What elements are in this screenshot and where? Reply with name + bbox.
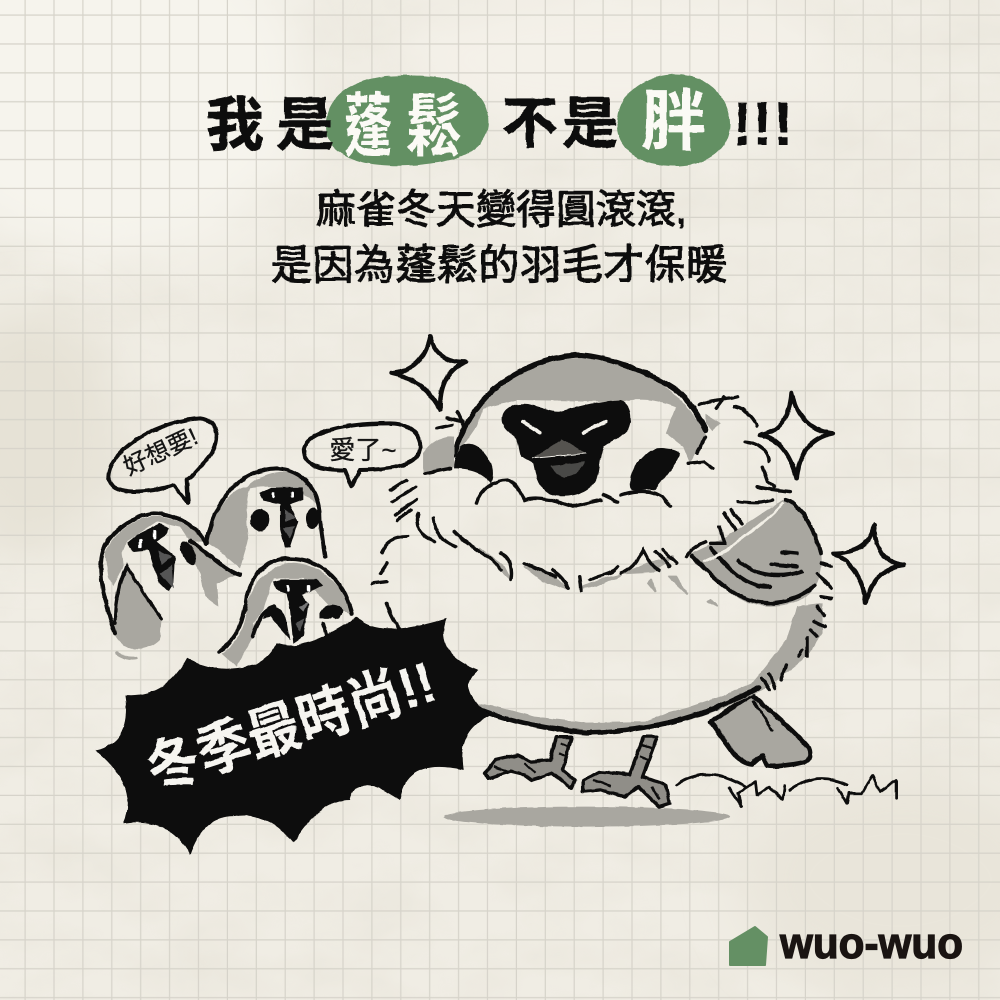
green blob behind 胖 <box>617 74 730 166</box>
small birds group <box>101 418 420 667</box>
green blob behind 蓬鬆 <box>326 75 488 166</box>
logo wordmark: wuo-wuo <box>779 919 963 968</box>
subtitle line 1: 麻雀冬天變得圓滾滾, <box>316 188 687 232</box>
right cheek <box>630 448 680 490</box>
title text white: 蓬: 蓬 <box>344 87 392 165</box>
tail line <box>754 702 773 730</box>
subtitle <box>271 188 728 288</box>
title text black: 我是: 我是 <box>206 93 334 158</box>
sparkle right upper <box>761 393 833 478</box>
ruff shadow <box>480 548 718 607</box>
face mask <box>502 400 631 496</box>
speech text: 好想要: 好想要! <box>119 423 202 481</box>
burst shape <box>95 617 492 855</box>
starburst callout <box>95 617 492 855</box>
logo <box>730 919 963 968</box>
speech text: 愛了: 愛了~ <box>329 435 397 465</box>
speech bubble: 好想要 <box>108 418 217 503</box>
ground grass strokes <box>676 775 897 807</box>
sparkle top left <box>392 337 466 410</box>
body outline <box>459 687 759 733</box>
beak highlight <box>532 453 587 458</box>
right shoulder shading <box>705 413 721 432</box>
small bird: left <box>101 513 240 659</box>
logo house icon <box>730 927 767 965</box>
mouth <box>550 462 585 477</box>
tail <box>711 695 810 766</box>
feather strokes <box>373 397 831 690</box>
sparkle right lower <box>833 525 903 603</box>
left cheek <box>454 444 493 483</box>
head gray cap <box>456 358 705 463</box>
legs and feet <box>485 737 669 807</box>
body gray shading <box>459 603 823 734</box>
title exclamation marks: !!! <box>732 90 794 159</box>
beak <box>532 438 587 458</box>
small bird: front <box>218 558 352 667</box>
eye highlights <box>523 422 606 433</box>
head outline <box>454 355 705 455</box>
small bird: back <box>207 468 325 568</box>
title <box>206 74 794 166</box>
left shoulder shading <box>423 436 454 473</box>
main sparrow <box>373 337 903 827</box>
wing lines <box>692 500 821 603</box>
burst text: 冬季最時尚!! <box>138 649 444 804</box>
speech bubble: 愛了 <box>303 423 420 487</box>
wing <box>692 500 822 606</box>
title text black: 不是: 不是 <box>502 92 618 155</box>
wing highlight <box>704 503 783 562</box>
subtitle line 2: 是因為蓬鬆的羽毛才保暖 <box>271 242 728 288</box>
title text white: 鬆: 鬆 <box>406 88 462 165</box>
title text white: 胖: 胖 <box>641 84 707 158</box>
ground shadow <box>444 807 730 827</box>
